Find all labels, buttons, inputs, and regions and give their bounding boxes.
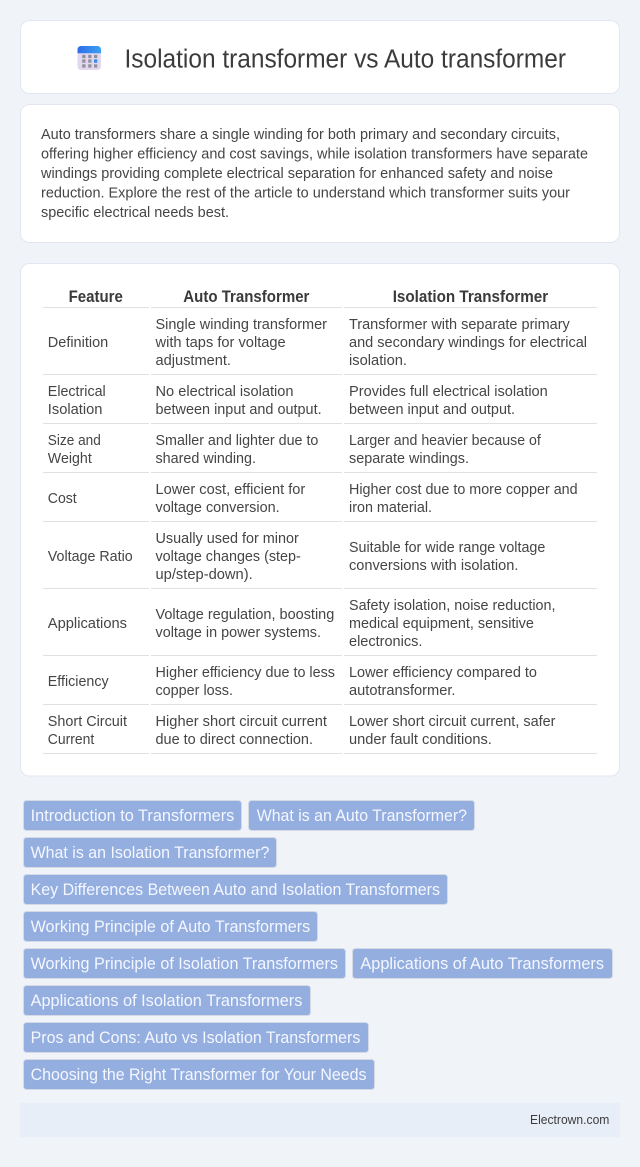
row: definition: and secondary windings for electrical <box>349 335 587 351</box>
row: size and weight: shared winding. <box>156 451 256 467</box>
row: electrical isolation: between input and output. <box>349 402 515 418</box>
button: working auto: Working Principle of Auto Transformers <box>31 917 310 936</box>
button: pros and cons: Pros and Cons: Auto vs Isolation Transformers <box>31 1028 360 1047</box>
footer <box>20 1103 620 1137</box>
button: working isolation: Working Principle of Isolation Transformers <box>31 954 338 973</box>
button: key differences: Key Differences Between Auto and Isolation Transformers <box>31 880 440 899</box>
row: voltage ratio: conversions with isolation. <box>349 558 518 574</box>
row: short circuit current: Current <box>48 732 94 748</box>
row: efficiency: copper loss. <box>156 683 233 699</box>
row: size and weight: separate windings. <box>349 451 469 467</box>
table header: Isolation Transformer <box>393 288 549 306</box>
intro text: windings providing complete electrical separation for enhanced safety and noise <box>40 166 553 182</box>
row: short circuit current: due to direct connection. <box>156 732 313 748</box>
row: efficiency: Lower efficiency compared to <box>349 665 537 681</box>
row: cost: iron material. <box>349 500 432 516</box>
row: short circuit current: under fault conditions. <box>349 732 492 748</box>
row: cost <box>48 482 578 516</box>
row: definition <box>48 317 587 369</box>
icon: calendar <box>78 46 101 70</box>
row: applications: electronics. <box>349 634 422 650</box>
row: size and weight: Size and <box>48 433 101 449</box>
button: key differences <box>24 874 448 904</box>
button: introduction <box>24 800 242 830</box>
row: voltage ratio: Usually used for minor <box>156 531 299 547</box>
intro text: reduction. Explore the rest of the article to understand which transformer suits your <box>41 186 570 202</box>
row: definition: Definition <box>48 335 108 351</box>
row: voltage ratio: Suitable for wide range voltage <box>349 540 545 556</box>
button: applications auto: Applications of Auto Transformers <box>360 954 604 973</box>
panel: comparison table <box>20 264 620 776</box>
row: definition: Single winding transformer <box>156 317 327 333</box>
panel: intro <box>20 104 620 242</box>
row: voltage ratio: Voltage Ratio <box>48 549 133 565</box>
row: short circuit current: Short Circuit <box>48 714 127 730</box>
row: voltage ratio: up/step-down). <box>156 567 253 583</box>
button: choosing: Choosing the Right Transformer for Your Needs <box>31 1065 366 1084</box>
footer: Electrown.com <box>530 1113 609 1127</box>
button: what is auto <box>248 800 474 830</box>
row: applications <box>48 598 556 650</box>
row: definition: with taps for voltage <box>154 335 286 351</box>
button: what is auto: What is an Auto Transformer? <box>257 806 467 825</box>
intro text: specific electrical needs best. <box>41 205 229 221</box>
intro text <box>40 127 588 221</box>
row: size and weight: Weight <box>48 451 92 467</box>
button: choosing <box>24 1060 374 1090</box>
button: introduction: Introduction to Transformers <box>31 806 234 825</box>
row: applications: medical equipment, sensitive <box>349 616 534 632</box>
row: definition: Transformer with separate primary <box>349 317 571 333</box>
row: size and weight: Larger and heavier because of <box>349 433 542 449</box>
button: applications isolation <box>24 986 310 1016</box>
panel: topic links <box>24 800 612 1090</box>
intro text: Auto transformers share a single winding for both primary and secondary circuits, <box>41 127 560 143</box>
row: short circuit current: Lower short circuit current, safer <box>349 714 556 730</box>
button: what is isolation <box>24 838 276 868</box>
button: working isolation <box>24 948 346 978</box>
row: electrical isolation: Provides full electrical isolation <box>349 384 548 400</box>
row: electrical isolation <box>48 384 548 418</box>
row: definition: isolation. <box>349 353 407 369</box>
row: electrical isolation: Electrical <box>48 384 106 400</box>
row: efficiency: Higher efficiency due to less <box>156 665 335 681</box>
row: voltage ratio: voltage changes (step- <box>156 549 301 565</box>
panel: header <box>20 20 620 94</box>
row: voltage ratio <box>48 531 545 583</box>
table header <box>69 288 549 306</box>
row: size and weight <box>48 433 542 467</box>
row: cost: voltage conversion. <box>156 500 280 516</box>
button: pros and cons <box>24 1022 368 1052</box>
row: short circuit current: Higher short circuit current <box>156 714 327 730</box>
row: applications: Safety isolation, noise reduction, <box>349 598 556 614</box>
button: applications isolation: Applications of Isolation Transformers <box>31 991 302 1010</box>
intro text: offering higher efficiency and cost savings, while isolation transformers have separate <box>41 146 588 162</box>
row: cost: Cost <box>48 491 77 507</box>
row: applications: Applications <box>48 616 127 632</box>
row: efficiency: Efficiency <box>48 674 109 690</box>
button: applications auto <box>352 948 612 978</box>
row: cost: Higher cost due to more copper and <box>349 482 578 498</box>
row: electrical isolation: between input and output. <box>156 402 322 418</box>
row: size and weight: Smaller and lighter due to <box>156 433 318 449</box>
row: efficiency: autotransformer. <box>349 683 456 699</box>
title: Isolation transformer vs Auto transformer <box>124 46 566 74</box>
button: working auto <box>24 912 318 942</box>
row: efficiency <box>48 665 537 699</box>
table header: Auto Transformer <box>183 288 310 306</box>
table header: Feature <box>69 288 123 306</box>
row: electrical isolation: Isolation <box>48 402 102 418</box>
row: definition: adjustment. <box>156 353 231 369</box>
button: what is isolation: What is an Isolation Transformer? <box>31 843 269 862</box>
row: cost: Lower cost, efficient for <box>156 482 305 498</box>
row: electrical isolation: No electrical isolation <box>156 384 294 400</box>
row: applications: Voltage regulation, boosting <box>156 607 334 623</box>
row: applications: voltage in power systems. <box>156 625 321 641</box>
row: short circuit current <box>48 714 556 748</box>
